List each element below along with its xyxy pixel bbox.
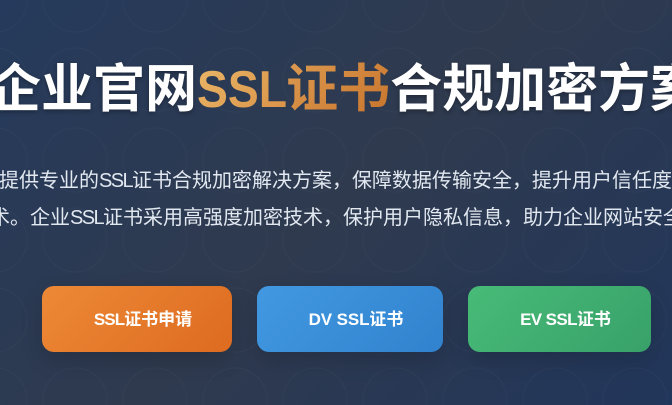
button: SSL certificate application: SSL证书申请 bbox=[94, 310, 192, 329]
title: SSL bbox=[197, 61, 287, 119]
button: EV SSL certificate: EV SSL证书 bbox=[520, 310, 611, 329]
button: DV SSL certificate bbox=[257, 286, 443, 352]
button: DV SSL certificate: DV SSL证书 bbox=[309, 310, 403, 329]
button: EV SSL certificate bbox=[468, 286, 651, 352]
description text: 提供专业的SSL证书合规加密解决方案，保障数据传输安全，提升用户信任度 bbox=[0, 170, 672, 192]
button: SSL certificate application bbox=[42, 286, 232, 352]
